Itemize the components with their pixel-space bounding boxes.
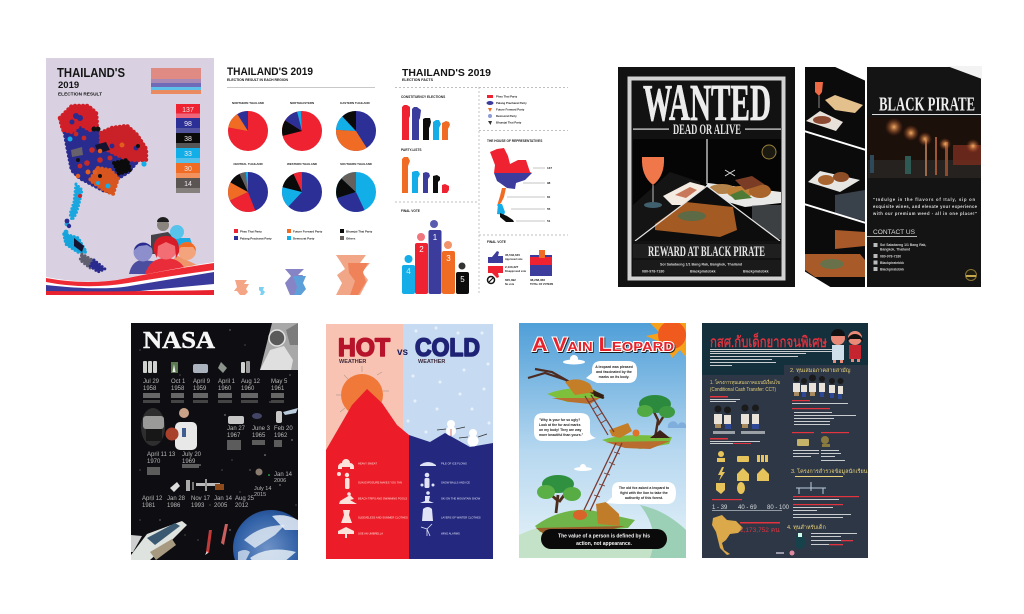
speech bubble 2: more beautiful than yours." <box>539 433 584 437</box>
hot weather captions: USE AN UMBRELLA <box>358 532 383 536</box>
brochure cocktail and platters <box>806 82 863 131</box>
sun <box>646 321 686 358</box>
timeline dates row 2 <box>147 426 293 465</box>
region labels: SOUTHERN THAILAND <box>340 162 372 166</box>
speech bubble 1: and fascinated by the <box>596 370 632 374</box>
map: house of representatives <box>490 148 552 223</box>
income range row: 40 - 69 <box>738 505 757 511</box>
timeline dates row 2: 1962 <box>274 433 288 439</box>
moral banner: action, not appearance. <box>576 541 633 547</box>
timeline dates row 2: July 20 <box>182 452 202 458</box>
food and drink photo collage <box>633 139 781 241</box>
final vote icons: Approved vote <box>505 258 523 261</box>
section headings: FINAL VOTE <box>401 209 420 213</box>
pie chart: eastern <box>346 121 366 141</box>
final vote icons: TOTAL OF VOTERS <box>530 283 554 286</box>
section headings: PARTY-LISTS <box>401 148 421 152</box>
section 2 <box>790 367 856 461</box>
white diagonal cuts <box>804 66 866 288</box>
cold weather captions: WIND ALARMS <box>441 532 460 536</box>
contact heading: CONTACT US <box>873 230 915 236</box>
party legend: Democrat Party <box>496 114 517 118</box>
heading: THAILAND'S 2019 <box>402 67 491 79</box>
timeline dates row 2: April 11 13 <box>147 452 176 458</box>
timeline dates row 1: 1960 <box>218 386 232 392</box>
timeline dates row 1: 1958 <box>171 386 185 392</box>
timeline dates row 3: 1986 <box>167 503 181 509</box>
timeline captions row 2 <box>147 440 282 475</box>
timeline row 1 photos <box>143 361 250 373</box>
astronaut black-and-white photo <box>260 323 298 370</box>
seats dot matrix <box>151 68 201 94</box>
Earth <box>233 510 298 560</box>
cold weather captions: SNOW BALLS AND ICE <box>441 480 470 484</box>
navy cold mountain <box>409 433 493 559</box>
heading: hot: HOT <box>338 334 390 362</box>
night bar photo <box>868 117 981 178</box>
timeline dates row 2: 1967 <box>227 433 241 439</box>
contact list: Blackpiratebkk <box>880 261 904 265</box>
heading: cold: COLD <box>415 334 480 362</box>
subtitle: dead or alive: DEAD OR ALIVE <box>673 122 741 138</box>
panel: election facts <box>395 67 568 295</box>
timeline dates row 1: April 1 <box>218 379 236 385</box>
map: house of representatives: 137 <box>547 166 552 170</box>
student count <box>740 522 780 534</box>
pie chart: central <box>238 182 258 202</box>
region labels: NORTHEASTERN <box>290 101 314 105</box>
timeline dates row 3: Aug 25 <box>235 496 255 502</box>
cold weather captions: LAYERS OF WINTER CLOTHES <box>441 516 481 520</box>
contact list: Bangkok, Thailand <box>880 248 910 252</box>
pie legend: Palang Pracharat Party <box>240 236 272 240</box>
pie legend: Future Forward Party <box>293 229 323 233</box>
brochure quote: with our premium weed - all in one place!" <box>872 211 977 216</box>
Thai title: กสศ.กับเด็กยากจนพิเศษ <box>710 332 827 351</box>
heading: ELECTION RESULT IN EACH REGION <box>227 78 289 82</box>
party legend: Palang Pracharat Party <box>496 101 527 105</box>
party seat legend: 38 <box>184 136 192 143</box>
panel: election result in each region <box>227 66 375 295</box>
section 2: 2. ทุนเสมอภาคสายสามัญ <box>790 367 851 374</box>
contact details: 080-978-7180 <box>642 270 664 274</box>
hot weather captions: BEACH TRIPS AND SWIMMING POOLS <box>358 496 407 500</box>
timeline dates row 3: Jan 28 <box>167 496 186 502</box>
section 3 <box>791 467 868 518</box>
pie chart: southern <box>346 182 366 202</box>
timeline dates row 3: July 14 <box>254 486 271 492</box>
timeline dates row 2: Feb 20 <box>274 426 293 432</box>
timeline dates row 1: Oct 1 <box>171 379 186 385</box>
timeline dates row 2: June 3 <box>252 426 271 432</box>
pie legend: Democrat Party <box>293 236 315 240</box>
party legend <box>486 94 527 125</box>
income range row: 80 - 100 <box>767 505 790 511</box>
final vote figure columns: 5 <box>460 275 465 284</box>
panel: hot vs cold poster <box>326 324 493 559</box>
title <box>57 68 125 96</box>
hot weather captions: HEAVY SWEAT <box>358 462 377 466</box>
map: house of representatives: 98 <box>547 181 551 185</box>
illustration: two children <box>831 329 863 363</box>
timeline dates row 1: 1961 <box>271 386 285 392</box>
timeline dates row 2: 1965 <box>252 433 266 439</box>
section 1 heading <box>710 379 780 393</box>
timeline dates row 2: Jan 27 <box>227 426 246 432</box>
section headings: CONSTITUENCY ELECTIONS <box>401 95 445 99</box>
final vote icons: No vote <box>505 283 515 286</box>
cold weather captions <box>441 462 481 536</box>
timeline dates row 1: May 5 <box>271 379 288 385</box>
brochure quote: "Indulge in the flavors of Italy, sip on <box>873 197 975 202</box>
speech bubble 2: "Why is your fur so ugly? <box>539 418 580 422</box>
timeline captions row 1 <box>143 393 284 403</box>
final vote figure columns: 1 <box>433 233 438 242</box>
speech bubble 3: fight with the lion to take the <box>620 491 668 495</box>
timeline dates row 3: 2006 <box>274 478 286 484</box>
speech bubble 3 <box>606 482 676 504</box>
timeline dates row 2: 1970 <box>147 459 161 465</box>
sub-heading: weather: WEATHER <box>418 359 445 365</box>
pie legend: Pheu Thai Party <box>240 229 262 233</box>
final vote figure columns: 3 <box>446 254 451 263</box>
section headings: THE HOUSE OF REPRESENTATIVES <box>487 139 542 143</box>
panel: NASA timeline poster <box>131 323 298 560</box>
section 4: 4. ทุนสำหรับเด็ก <box>787 523 826 531</box>
student count: 1,173,752 คน <box>740 527 780 534</box>
party seat legend <box>176 104 200 193</box>
final vote figure columns <box>402 220 469 294</box>
speech bubble 3: authority of this forest. <box>625 496 663 500</box>
portraits of party leaders <box>129 217 196 274</box>
pie legend <box>234 229 373 240</box>
heading: ELECTION FACTS <box>402 78 434 82</box>
map: house of representatives: 51 <box>547 219 551 223</box>
top island <box>528 369 604 404</box>
speech bubble 1: A leopard was pleased <box>595 365 633 369</box>
timeline dates row 3: 1993 <box>191 503 205 509</box>
panel: Black Pirate brochure main page <box>867 66 982 287</box>
pie chart: western <box>292 182 312 202</box>
sun <box>336 366 389 416</box>
timeline dates row 3: 2015 <box>254 492 266 498</box>
sub-heading: weather: WEATHER <box>339 359 366 365</box>
Thai flag waves <box>46 262 214 295</box>
speech bubble 2: on my body! They are way <box>539 428 582 432</box>
contact list: Soi Saladaeng 1/1 Bang Rak, <box>880 243 926 247</box>
section 3: 3. โครงการสำรวจข้อมูลนักเรียน <box>791 467 868 475</box>
condition icons <box>716 451 769 494</box>
party seat legend: 14 <box>184 181 192 188</box>
speech bubble 2 <box>534 413 596 441</box>
logo badge <box>966 270 976 280</box>
map of Thailand from party dots <box>60 106 147 272</box>
party seat legend: 137 <box>182 107 194 114</box>
speech bubble 3: The old fox asked a leopard to <box>619 486 669 490</box>
final vote icons: 2,130,327 <box>505 265 519 269</box>
middle island <box>602 395 675 449</box>
cold weather icons <box>420 462 436 536</box>
timeline dates row 1: Jul 29 <box>143 379 160 385</box>
region labels: EASTERN THAILAND <box>340 101 370 105</box>
cold weather captions: SKI ON THE MOUNTAIN SNOW <box>441 496 481 500</box>
final vote icons: 605,392 <box>505 278 516 282</box>
speech bubble 2: Look at the fur and marks <box>539 423 581 427</box>
timeline dates row 1: 1958 <box>143 386 157 392</box>
final vote icons <box>488 250 554 286</box>
bar chart: party-list raised hands <box>402 157 449 193</box>
contact details: Soi Saladaeng 1/1 Bang Rak, Bangkok, Thailand <box>660 262 742 266</box>
timeline dates row 3 <box>142 472 293 509</box>
contact details: Blackpiratebkk <box>743 270 769 274</box>
footer logos <box>776 550 794 556</box>
final vote icons: 35,532,645 <box>505 253 520 257</box>
pie chart: northeastern <box>292 121 312 141</box>
section 1 heading: (Conditional Cash Transfer: CCT) <box>710 387 776 393</box>
lower island <box>535 475 635 535</box>
speech bubble 1: marks on its body. <box>599 375 629 379</box>
panel: Black Pirate brochure photo strip <box>804 66 866 288</box>
moral banner <box>541 529 667 549</box>
section 1 heading: 1. โครงการทุนเสมอภาคแบบมีเงื่อนไข <box>710 379 780 386</box>
timeline dates row 3: April 12 <box>142 496 163 502</box>
region labels: NORTHERN THAILAND <box>232 101 264 105</box>
party seat legend: 98 <box>184 121 192 128</box>
timeline dates row 3: 2005 <box>214 503 228 509</box>
contact list: 080-978-7180 <box>880 254 901 258</box>
Apollo capsule <box>141 408 165 446</box>
heading: vs: vs <box>397 347 409 358</box>
timeline dates row 3: Jan 14 <box>214 496 233 502</box>
panel: Thailand 2019 election result poster <box>46 58 214 295</box>
contact details <box>633 260 781 275</box>
dashed dividers <box>395 87 568 295</box>
cold weather captions: PILE OF ICE FLOWS <box>441 462 467 466</box>
timeline dates row 3: Jan 14 <box>274 472 293 478</box>
reward strip: REWARD AT BLACK PIRATE <box>648 244 765 260</box>
final vote icons: 38,268,366 <box>530 278 545 282</box>
intro text lines <box>710 349 834 366</box>
brochure quote: exquisite wines, and elevate your experience <box>873 204 978 209</box>
title: 2019 <box>58 80 79 91</box>
star field <box>140 329 296 540</box>
brochure quote <box>872 197 978 216</box>
pie chart: northern <box>238 121 258 141</box>
bar chart: constituency raised hands <box>402 105 450 140</box>
map: house of representatives: 55 <box>547 207 551 211</box>
party legend: Bhumjai Thai Party <box>496 120 522 124</box>
panel: Wanted poster <box>618 67 795 287</box>
party seat legend: 30 <box>184 166 192 173</box>
timeline row 2 photos <box>228 408 298 424</box>
section headings: FINAL VOTE <box>487 240 506 244</box>
NASA title: NASA <box>143 328 216 354</box>
timeline dates row 2: 1969 <box>182 459 196 465</box>
panel: Thai infographic on students in poverty <box>702 323 868 558</box>
hot weather captions <box>358 462 408 536</box>
contact list <box>874 243 926 272</box>
sub-heading: weather <box>339 359 445 365</box>
party legend: Pheu Thai Party <box>496 94 518 98</box>
final vote figure columns: 4 <box>406 267 411 276</box>
timeline dates row 1: Aug 12 <box>241 379 261 385</box>
timeline dates row 1: April 9 <box>193 379 211 385</box>
income range row <box>712 499 790 511</box>
rockets <box>205 524 228 555</box>
speech bubble 1 <box>586 361 637 383</box>
green hills <box>519 505 686 558</box>
title: A Vain Leopard <box>532 335 674 356</box>
contact details: Blackpiratebkk <box>690 270 716 274</box>
heading <box>227 66 375 88</box>
astronaut portrait <box>166 408 197 450</box>
timeline dates row 1: 1959 <box>193 386 207 392</box>
final vote figure columns: 2 <box>419 245 424 254</box>
brochure bruschetta platter <box>808 171 865 221</box>
hot weather icons <box>337 459 357 538</box>
timeline dates row 3: 1981 <box>142 503 156 509</box>
snowmen <box>437 420 487 446</box>
panel: A Vain Leopard poster <box>519 321 686 558</box>
snowfall <box>406 326 490 434</box>
title: ELECTION RESULT <box>58 92 102 97</box>
income range row: 1 - 39 <box>712 505 728 511</box>
region labels: WESTERN THAILAND <box>287 162 317 166</box>
section 1 body <box>710 396 765 444</box>
clouds <box>563 355 686 471</box>
region labels: CENTRAL THAILAND <box>233 162 263 166</box>
section 4 <box>787 523 857 549</box>
hot weather captions: SUN EXPOSURE MAKES YOU TAN <box>358 480 402 484</box>
timeline dates row 3: 2012 <box>235 503 249 509</box>
gold map of Thailand <box>712 515 743 555</box>
hot weather captions: SLEEVELESS AND SUMMER CLOTHES <box>358 516 408 520</box>
moral banner: The value of a person is defined by his <box>558 534 650 540</box>
stacked people silhouettes <box>234 255 370 295</box>
red hot mountain <box>326 389 409 559</box>
title: WANTED: WANTED <box>643 75 771 132</box>
timeline dates row 1 <box>143 378 288 390</box>
contact list: Blackpiratebkk <box>880 268 904 272</box>
ladders <box>584 395 622 511</box>
reward strip <box>633 244 781 260</box>
final vote icons: Disapproved vote <box>505 270 527 273</box>
section headings <box>401 95 542 244</box>
region labels <box>232 101 372 166</box>
pie legend: Others <box>346 236 356 240</box>
party legend: Future Forward Party <box>496 108 525 112</box>
timeline dates row 3: Nov 17 <box>191 496 211 502</box>
party seat legend: 33 <box>184 151 192 158</box>
space station and moon <box>170 468 270 492</box>
space shuttle <box>131 521 187 560</box>
heading: THAILAND'S 2019 <box>227 66 313 78</box>
contact heading <box>867 230 917 237</box>
pie legend: Bhumjai Thai Party <box>346 229 373 233</box>
title: THAILAND'S <box>57 66 125 80</box>
timeline dates row 1: 1960 <box>241 386 255 392</box>
brochure wood board <box>805 230 865 277</box>
map: house of representatives: 81 <box>547 195 551 199</box>
